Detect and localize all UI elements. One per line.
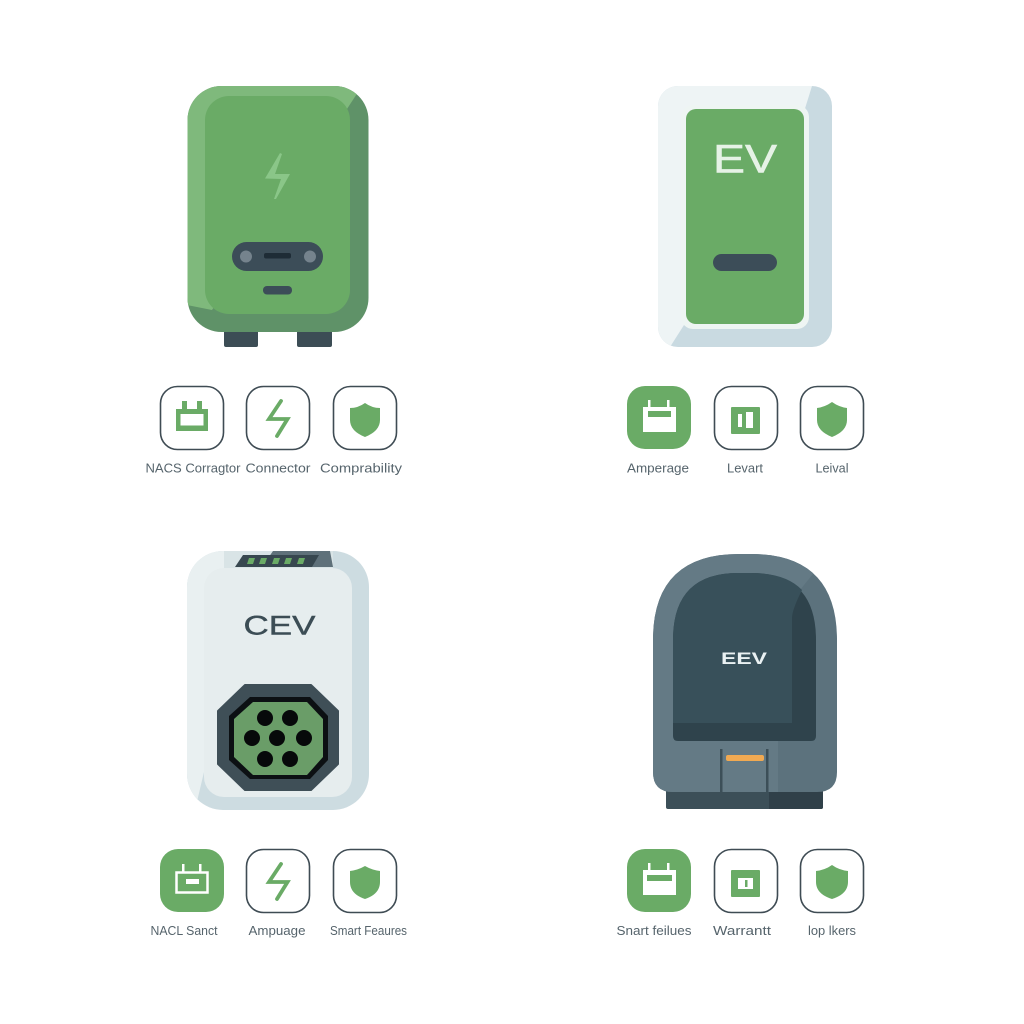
- top LED strip: [235, 551, 333, 567]
- labels: Amperage: [627, 460, 689, 476]
- icon row: top right: [627, 386, 864, 476]
- labels: Warrantt: [713, 923, 771, 938]
- icon: shield: [800, 850, 864, 912]
- labels: [146, 460, 403, 476]
- status bar: [713, 254, 777, 271]
- labels: [150, 923, 407, 938]
- icon row: bottom left: [150, 849, 407, 938]
- CEV label: CEV: [244, 610, 316, 640]
- icon: shield: [334, 850, 396, 912]
- icon row: top left: [146, 386, 403, 476]
- EEV label: EEV: [721, 649, 768, 668]
- icon: level: [714, 386, 778, 450]
- labels: lop lkers: [808, 923, 856, 938]
- latch with orange indicator: [720, 749, 768, 792]
- icon: bolt: [246, 850, 310, 912]
- icon: shield: [800, 386, 864, 450]
- charging port: [232, 242, 323, 271]
- icon: filled battery: [627, 386, 691, 449]
- icon: battery: [160, 386, 224, 450]
- labels: Comprability: [320, 460, 403, 476]
- device: white EV charger with green panel: [658, 86, 832, 347]
- device: green wall charger: [187, 86, 368, 347]
- labels: [616, 923, 856, 938]
- icon: filled battery: [627, 849, 691, 912]
- device: white charger with connector: [187, 551, 369, 810]
- labels: Smart Feaures: [330, 923, 407, 938]
- labels: Leival: [816, 460, 849, 476]
- labels: Levart: [727, 460, 763, 476]
- labels: NACS Corragtor: [146, 460, 241, 476]
- icon: filled battery outline: [160, 849, 224, 912]
- device: dark slate charger: [653, 554, 837, 809]
- labels: NACL Sanct: [150, 923, 218, 938]
- icon: warranty: [714, 850, 778, 912]
- labels: [627, 460, 849, 476]
- labels: Connector: [246, 460, 311, 476]
- icon: shield: [334, 386, 396, 450]
- status slot: [263, 286, 292, 294]
- connector socket: [218, 685, 338, 790]
- charger feet: [224, 326, 332, 347]
- screen: [673, 573, 816, 741]
- lightning bolt emblem: [265, 153, 290, 199]
- EV label: EV: [713, 138, 777, 182]
- icon: bolt: [246, 386, 310, 450]
- labels: Snart feilues: [616, 923, 692, 938]
- labels: Ampuage: [248, 923, 306, 938]
- icon row: bottom right: [616, 849, 864, 938]
- base: [666, 785, 823, 809]
